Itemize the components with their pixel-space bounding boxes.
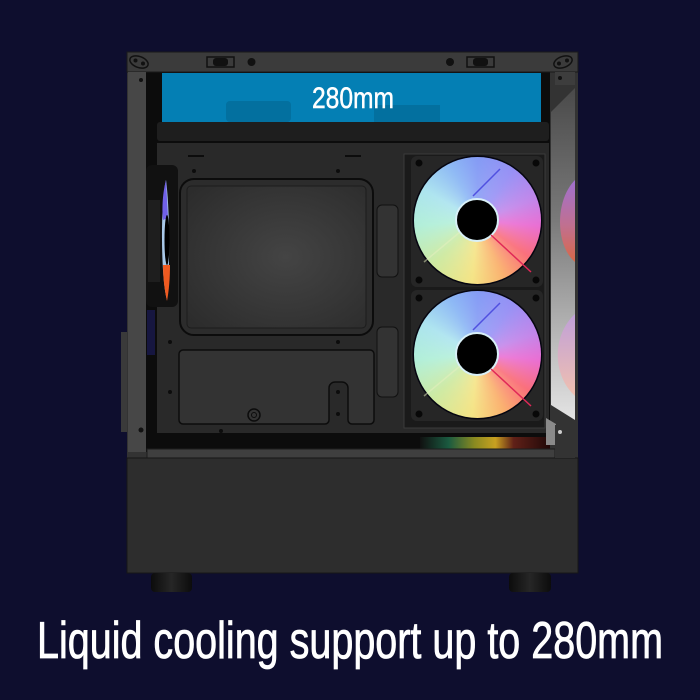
icon: right clip	[467, 57, 494, 67]
cable slots	[377, 205, 398, 397]
top recess	[157, 122, 549, 141]
blue vent back side	[147, 310, 155, 355]
RGB light strip	[420, 437, 550, 449]
fan reflection top	[560, 180, 575, 262]
fan bottom	[414, 290, 540, 418]
fan top	[414, 156, 540, 284]
side fan	[146, 165, 178, 307]
right foot	[509, 573, 551, 592]
top right corner	[555, 72, 575, 85]
top panel	[127, 52, 578, 72]
front right lower corner	[555, 425, 575, 458]
upper cutout	[180, 179, 373, 335]
chassis	[127, 52, 578, 573]
tray holes	[168, 155, 361, 433]
bottom shroud	[127, 458, 578, 573]
left pillar	[128, 72, 146, 452]
motherboard tray	[157, 143, 549, 433]
dimension label: 280mm	[312, 82, 394, 115]
icon: left handle	[128, 54, 150, 70]
lower cutout	[179, 350, 374, 424]
fan blade lines top	[424, 169, 531, 272]
left foot	[151, 573, 192, 592]
front I/O ports	[121, 332, 128, 432]
fan reflection bottom	[558, 314, 575, 396]
glass clip	[546, 418, 556, 445]
fan bracket	[404, 154, 545, 428]
blue dimension bar	[162, 73, 541, 122]
glass side panel	[551, 88, 575, 420]
icon: standoff	[248, 409, 260, 421]
icon: right handle	[552, 54, 574, 70]
fan blade lines bottom	[424, 303, 531, 406]
interior	[146, 72, 550, 452]
floor ledge	[147, 449, 555, 458]
icon: left clip	[207, 57, 234, 67]
bar shadow details	[226, 101, 440, 122]
